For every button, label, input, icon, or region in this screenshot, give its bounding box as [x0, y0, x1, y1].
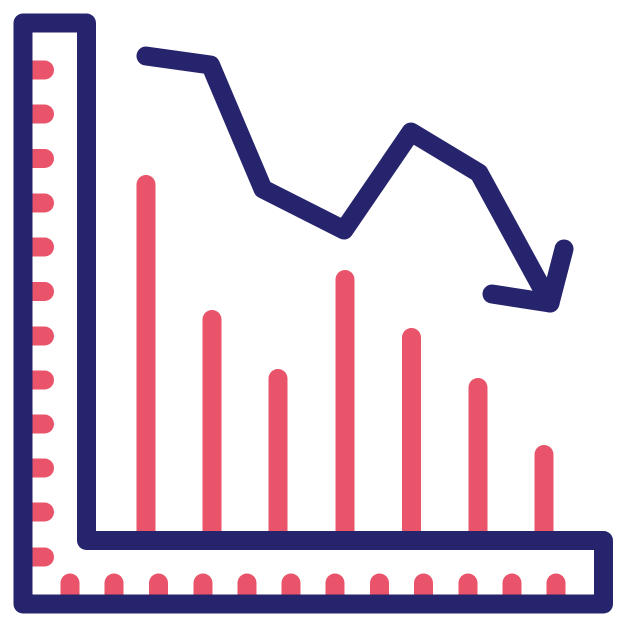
bottom axis tick marks — [70, 583, 556, 597]
bar chart: seven declining bars — [146, 184, 544, 535]
left axis tick marks — [30, 70, 44, 557]
trend line with downward arrow — [146, 56, 564, 303]
arrow head — [492, 249, 564, 303]
